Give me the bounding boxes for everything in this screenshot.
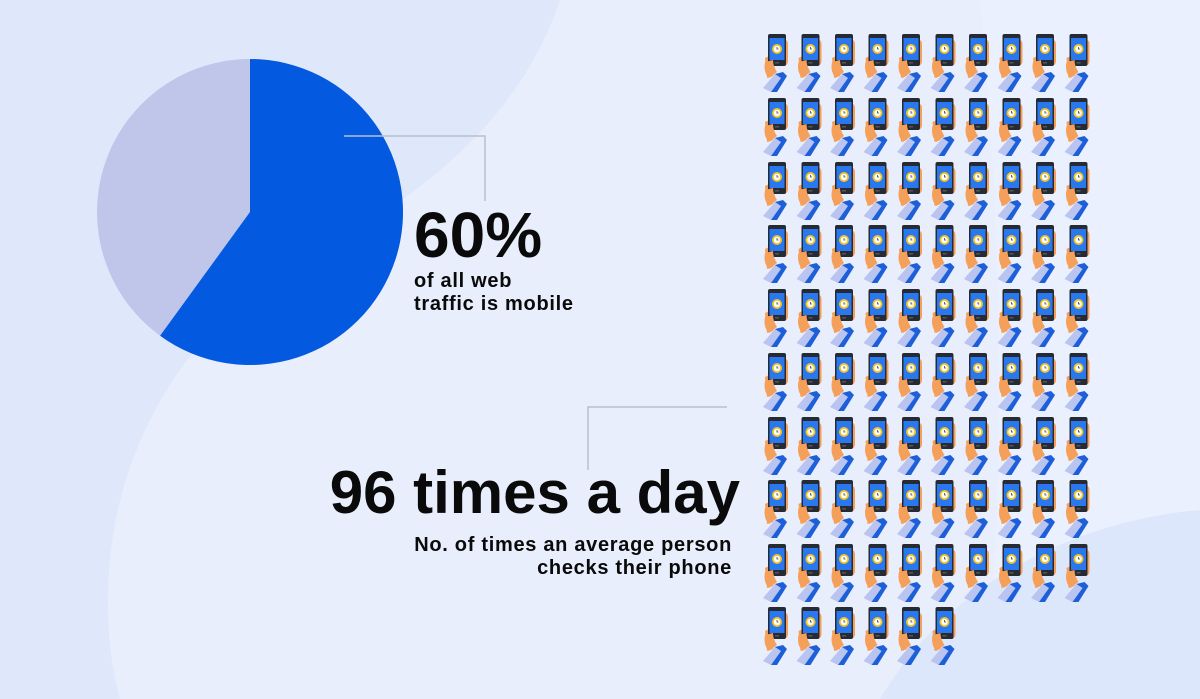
stat: 60%: traffic is mobile: [414, 293, 574, 315]
stat: 60%: [414, 199, 574, 315]
stat: 96 times a day: No. of times an average person: [414, 534, 732, 556]
stat: 60%: of all web: [414, 270, 512, 292]
connector line 1: [344, 135, 486, 201]
stat: 60%: 60%: [414, 199, 542, 271]
pie chart: [97, 59, 403, 365]
stat: 96 times a day: 96 times a day: [330, 459, 740, 526]
stat: 96 times a day: [330, 459, 740, 579]
connector line 2: [587, 406, 727, 470]
stat: 96 times a day: checks their phone: [537, 557, 732, 579]
